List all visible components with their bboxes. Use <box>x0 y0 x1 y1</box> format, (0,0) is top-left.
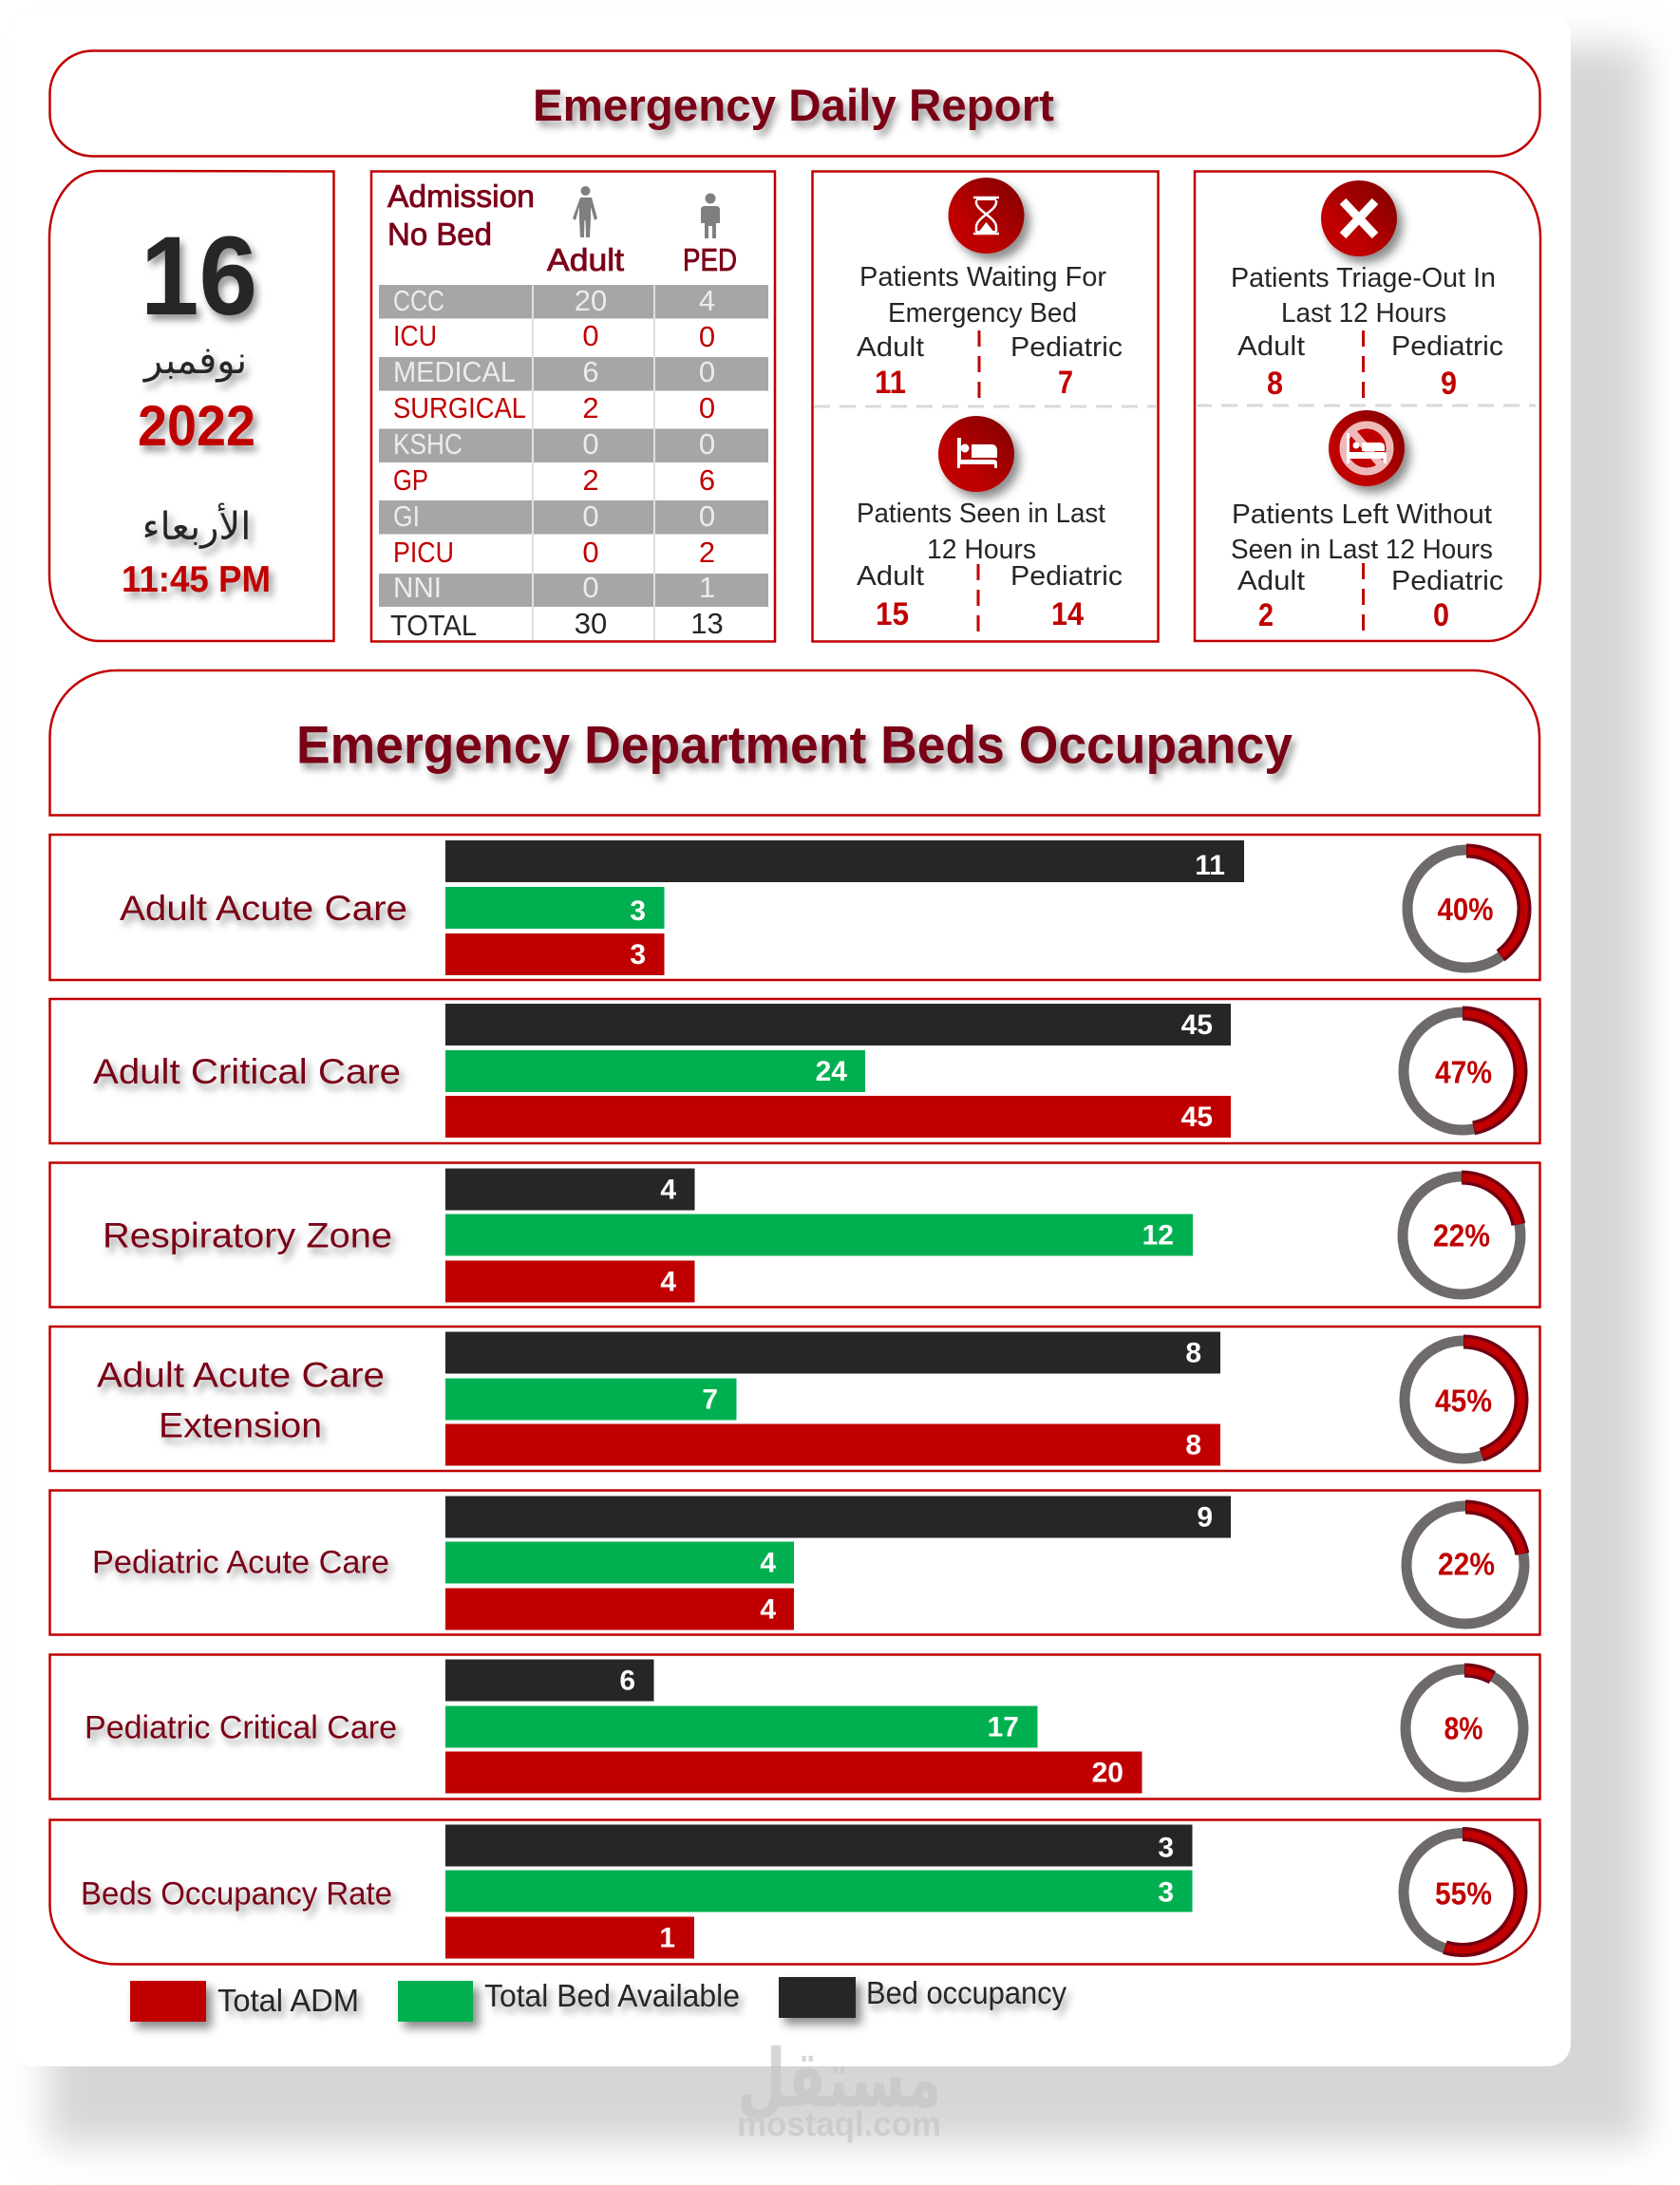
legend <box>130 1975 1067 2022</box>
bar chart <box>445 1497 1231 1629</box>
bar chart: 9 <box>1197 1502 1213 1533</box>
bar chart: 3 <box>630 939 646 970</box>
bar chart <box>445 1660 1142 1793</box>
title: Emergency Daily Report <box>533 80 1054 130</box>
text: triage-out: 9 <box>1441 366 1457 402</box>
bar chart: 4 <box>760 1593 776 1626</box>
bar chart: 7 <box>702 1384 718 1415</box>
adult column values: 20 <box>575 284 607 317</box>
bar chart: 12 <box>1142 1219 1174 1252</box>
bar chart: 4 <box>660 1174 676 1206</box>
table row labels: SURGICAL <box>393 391 526 424</box>
label: Adult Acute Care <box>120 889 407 928</box>
bar chart: 45 <box>1181 1009 1213 1041</box>
donut 47%: 47% <box>1435 1054 1492 1090</box>
text: left without seen: Patients Left Without <box>1232 499 1492 530</box>
pediatric column values: 2 <box>699 536 715 569</box>
weekday: الأربعاء <box>142 502 251 549</box>
panel: respiratory zone <box>49 1162 1540 1307</box>
bar chart: 8 <box>1185 1430 1201 1460</box>
text: triage-out: Last 12 Hours <box>1281 298 1446 329</box>
donut 8% <box>1406 1669 1523 1787</box>
bar chart: 17 <box>988 1711 1019 1743</box>
table row labels <box>390 284 526 642</box>
table row labels: CCC <box>393 284 444 317</box>
text: patients seen: 12 Hours <box>927 535 1036 565</box>
table heading: PED <box>683 242 737 277</box>
label <box>97 1356 385 1445</box>
legend: total adm: Total ADM <box>217 1983 359 2018</box>
text: patients waiting: 11 <box>875 365 906 401</box>
pediatric column values: 13 <box>690 607 724 640</box>
label: Beds Occupancy Rate <box>81 1876 392 1912</box>
panel: adult critical care <box>49 999 1540 1143</box>
panel: pediatric critical care <box>49 1654 1540 1799</box>
bar chart <box>445 1825 1193 1958</box>
table row labels: NNI <box>393 571 442 604</box>
bar chart <box>445 840 1244 975</box>
text: left without seen: Seen in Last 12 Hours <box>1231 535 1493 565</box>
label: Adult Critical Care <box>93 1052 401 1091</box>
label: Pediatric Critical Care <box>85 1709 397 1745</box>
table stripes <box>379 285 768 607</box>
bar chart <box>445 1331 1220 1466</box>
icon: hourglass <box>948 178 1024 254</box>
panel: beds occupancy rate <box>49 1819 1540 1964</box>
pediatric column values: 6 <box>699 463 715 497</box>
label: Pediatric Acute Care <box>92 1544 389 1580</box>
table heading: Adult <box>547 242 624 277</box>
legend: bed occupancy <box>779 1975 1067 2018</box>
panel: admission no bed table <box>371 171 775 642</box>
text: patients seen: Pediatric <box>1010 561 1123 592</box>
donut 22%: 22% <box>1438 1546 1495 1582</box>
pediatric column values: 0 <box>699 499 715 533</box>
title panel <box>49 51 1540 156</box>
adult column values: 2 <box>582 391 599 424</box>
legend: total bed available: Total Bed Available <box>484 1978 740 2013</box>
adult column values: 2 <box>582 463 599 497</box>
bar chart: 11 <box>1195 850 1225 881</box>
bar chart: 20 <box>1092 1757 1123 1789</box>
text: left without seen <box>1231 499 1503 633</box>
text: triage-out: Pediatric <box>1391 331 1503 362</box>
legend: total adm <box>130 1981 359 2022</box>
panel: adult acute care <box>49 835 1540 980</box>
text: left without seen: Adult <box>1237 566 1305 596</box>
table row labels: MEDICAL <box>393 355 516 388</box>
adult column values: 30 <box>575 607 607 640</box>
adult column values: 0 <box>582 427 599 461</box>
day number: 16 <box>141 214 257 339</box>
text: patients seen: 14 <box>1051 596 1084 632</box>
bar chart: 4 <box>760 1548 776 1578</box>
text: patients waiting <box>857 262 1123 401</box>
donut 22%: 22% <box>1433 1217 1490 1253</box>
bar chart: 8 <box>1185 1337 1201 1369</box>
donut 45% <box>1405 1341 1522 1459</box>
donut 55% <box>1404 1833 1521 1951</box>
pediatric column values: 0 <box>699 355 715 388</box>
legend: bed occupancy: Bed occupancy <box>866 1975 1067 2010</box>
text: patients waiting: Adult <box>857 332 924 363</box>
adult column values: 0 <box>582 536 599 569</box>
icon: no bed <box>1329 410 1405 486</box>
donut 45%: 45% <box>1435 1383 1492 1419</box>
donut 8%: 8% <box>1444 1711 1483 1745</box>
table row labels: ICU <box>393 319 437 352</box>
text: triage-out: 8 <box>1267 366 1283 402</box>
text: patients seen: Adult <box>857 561 924 592</box>
pediatric column values: 0 <box>699 427 715 461</box>
donut 22% <box>1406 1506 1524 1624</box>
bar chart: 1 <box>659 1922 675 1954</box>
time: 11:45 PM <box>122 559 271 600</box>
text: left without seen: Pediatric <box>1391 566 1503 596</box>
text: patients waiting: Pediatric <box>1010 332 1123 363</box>
label: Adult Acute Care <box>97 1356 385 1394</box>
label: Respiratory Zone <box>103 1215 392 1255</box>
icon: pediatric <box>701 194 720 238</box>
text: triage-out: Adult <box>1237 331 1305 362</box>
adult column values: 0 <box>582 571 599 604</box>
panel: waiting and seen patients <box>813 171 1159 642</box>
table heading: No Bed <box>387 217 492 252</box>
panel: triage-out and left without seen <box>1195 171 1540 641</box>
text: triage-out <box>1231 263 1503 402</box>
table heading: Admission <box>387 179 535 214</box>
pediatric column values: 1 <box>699 571 715 604</box>
table row labels: KSHC <box>393 427 462 461</box>
text: patients seen <box>857 499 1123 632</box>
donut 40%: 40% <box>1438 892 1493 927</box>
bar chart: 45 <box>1181 1102 1213 1133</box>
bar chart: 3 <box>630 895 646 927</box>
pediatric column values: 0 <box>699 391 715 424</box>
panel: adult acute care extension <box>49 1327 1540 1471</box>
month: نوفمبر <box>142 339 247 383</box>
bar chart <box>445 1004 1231 1138</box>
donut 40% <box>1407 850 1525 968</box>
icon: bed <box>938 416 1014 492</box>
section heading panel <box>49 670 1539 815</box>
text: patients waiting: 7 <box>1058 365 1073 401</box>
pediatric column values: 0 <box>699 320 715 353</box>
table row labels: PICU <box>393 536 454 569</box>
table row labels: GI <box>393 499 420 533</box>
icon: cross <box>1321 180 1397 256</box>
donut 47% <box>1404 1012 1521 1130</box>
table heading <box>387 179 737 277</box>
pediatric column values <box>690 284 724 640</box>
year: 2022 <box>138 394 255 458</box>
donut 22% <box>1403 1177 1520 1294</box>
donut 55%: 55% <box>1435 1876 1492 1911</box>
table row labels: TOTAL <box>390 609 477 642</box>
adult column values: 0 <box>582 319 599 352</box>
bar chart <box>445 1168 1193 1303</box>
adult column values: 0 <box>582 499 599 533</box>
bar chart: 4 <box>660 1267 676 1297</box>
text: left without seen: 2 <box>1258 597 1274 633</box>
watermark: مستقل <box>737 2032 942 2125</box>
adult column values <box>575 284 607 640</box>
table row labels: GP <box>393 463 428 497</box>
watermark <box>737 2032 942 2143</box>
adult column values: 6 <box>582 355 599 388</box>
text: patients seen: Patients Seen in Last <box>857 499 1105 529</box>
bar chart: 3 <box>1158 1876 1174 1909</box>
text: patients waiting: Emergency Bed <box>888 298 1077 329</box>
bar chart: 6 <box>619 1666 635 1696</box>
bar chart: 3 <box>1158 1833 1174 1863</box>
legend: total bed available <box>398 1978 740 2022</box>
label: Extension <box>159 1405 322 1445</box>
bar chart: 24 <box>816 1056 847 1087</box>
text: patients seen: 15 <box>876 596 909 632</box>
panel: pediatric acute care <box>49 1491 1540 1635</box>
text: patients waiting: Patients Waiting For <box>859 262 1106 292</box>
section heading: Emergency Department Beds Occupancy <box>296 714 1293 775</box>
text: triage-out: Patients Triage-Out In <box>1231 263 1496 293</box>
text: left without seen: 0 <box>1433 597 1449 633</box>
panel: date <box>49 171 334 641</box>
watermark: mostaql.com <box>737 2104 941 2143</box>
icon: adult <box>573 186 597 237</box>
pediatric column values: 4 <box>699 284 715 317</box>
